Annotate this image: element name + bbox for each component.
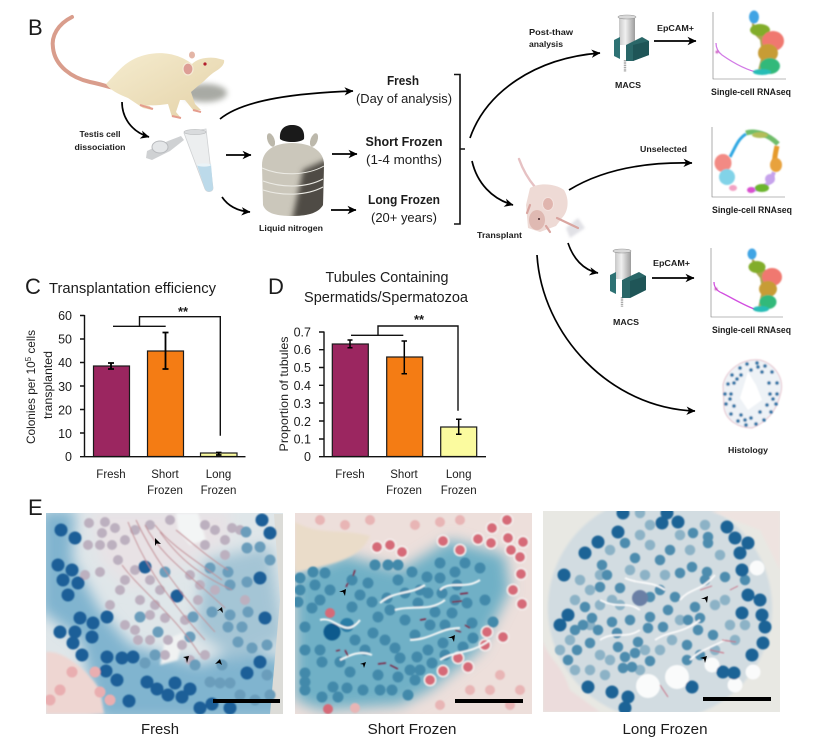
bar: long frozen C xyxy=(200,453,237,456)
text: testis cell dissociation: dissociation xyxy=(74,142,126,152)
axis tick labels D: 0.5 xyxy=(294,361,311,375)
icon: liquid nitrogen tank xyxy=(262,125,324,216)
bar: long frozen D xyxy=(441,427,477,456)
text: MACS top: MACS xyxy=(615,80,641,90)
chart: UMAP top xyxy=(713,10,786,79)
significance stars D: ** xyxy=(414,312,425,327)
text: short frozen condition: Short Frozen xyxy=(366,135,442,149)
arrow: tube to liquid nitrogen xyxy=(226,154,251,156)
text: fresh condition: (Day of analysis) xyxy=(356,92,452,106)
micrograph: short frozen xyxy=(295,513,532,714)
text: MACS lower: MACS xyxy=(613,317,639,327)
arrow: tank to long frozen xyxy=(331,209,356,211)
bar: short frozen D xyxy=(387,357,423,456)
arrow: mouse to unselected scRNAseq xyxy=(569,163,692,190)
micrograph: long frozen xyxy=(543,511,780,712)
axis tick labels D: 0.7 xyxy=(294,326,311,340)
y-axis label C xyxy=(24,330,55,444)
arrowheads: long frozen xyxy=(700,596,708,663)
category labels D: Short xyxy=(390,469,419,481)
text: testis cell dissociation: Testis cell xyxy=(80,129,120,139)
panel D: tubules chart xyxy=(268,270,486,497)
axis tick labels D xyxy=(294,326,311,464)
axis tick labels D: 0 xyxy=(304,450,311,464)
axis tick labels D: 0.4 xyxy=(294,379,311,393)
chart title D: Tubules Containing xyxy=(326,270,448,286)
axis tick labels C: 30 xyxy=(58,380,72,394)
axes C xyxy=(80,315,246,457)
axis tick labels D: 0.2 xyxy=(294,415,311,429)
arrow: mouse to histology xyxy=(537,255,695,411)
text: long frozen condition: Long Frozen xyxy=(368,193,440,207)
text: EpCAM+ top: EpCAM+ xyxy=(657,23,694,33)
arrow: to post-thaw analysis xyxy=(470,53,600,138)
micrograph caption: long frozen: Long Frozen xyxy=(622,722,708,738)
axis tick labels C: 20 xyxy=(58,404,72,418)
axis tick labels C: 60 xyxy=(58,309,72,323)
text: histology: Histology xyxy=(728,445,768,455)
text: liquid nitrogen: Liquid nitrogen xyxy=(259,223,323,233)
axis tick labels D: 0.1 xyxy=(294,432,311,446)
arrowheads: fresh xyxy=(155,538,223,665)
y-axis label C: Colonies per 10 xyxy=(24,360,38,444)
arrow: mouse to MACS xyxy=(568,243,598,273)
arrow: tube lower curve to liquid nitrogen xyxy=(222,197,250,212)
significance bracket D xyxy=(351,326,458,411)
panel E: histology micrographs xyxy=(28,495,780,738)
category labels D: Long xyxy=(446,469,471,481)
y-axis label C: cells xyxy=(24,330,38,357)
category labels C: Long xyxy=(206,469,231,481)
category labels C: Fresh xyxy=(96,469,126,481)
error bars D xyxy=(348,340,462,434)
category labels C xyxy=(96,469,236,497)
text: single-cell RNAseq lower: Single-cell RNAseq xyxy=(712,325,791,335)
category labels C: Short xyxy=(151,469,180,481)
text: single-cell RNAseq top: Single-cell RNAseq xyxy=(711,87,791,97)
bracket: merge conditions xyxy=(454,74,465,224)
axis tick labels C: 40 xyxy=(58,356,72,370)
category labels C: Frozen xyxy=(201,485,236,497)
error bars C xyxy=(108,332,222,455)
axis tick labels C xyxy=(58,309,72,464)
text: transplant: Transplant xyxy=(477,230,522,240)
panel letter B: B xyxy=(28,15,43,40)
y-axis label C: 5 xyxy=(24,356,33,361)
category labels D: Fresh xyxy=(335,469,365,481)
text: long frozen condition xyxy=(368,193,440,225)
significance stars C: ** xyxy=(178,304,189,319)
text: short frozen condition: (1-4 months) xyxy=(366,153,442,167)
text: single-cell RNAseq middle: Single-cell RNAseq xyxy=(712,205,792,215)
micrograph: fresh xyxy=(40,510,290,720)
category labels C: Frozen xyxy=(147,485,183,497)
icon: microcentrifuge tube xyxy=(146,129,213,192)
arrow: lower MACS to scRNAseq xyxy=(652,277,694,279)
axis tick labels D: 0.6 xyxy=(294,343,311,357)
scale bar: fresh xyxy=(213,699,280,703)
significance bracket C xyxy=(113,317,220,436)
axis tick labels D: 0.3 xyxy=(294,397,311,411)
text: EpCAM+ lower: EpCAM+ xyxy=(653,258,690,268)
axes D xyxy=(319,332,486,457)
arrow: MACS to scRNAseq top xyxy=(654,40,696,42)
panel B: experimental workflow xyxy=(28,10,792,455)
panel C: transplantation efficiency chart xyxy=(24,274,246,497)
text: fresh condition xyxy=(356,74,452,106)
arrow: to transplant mouse xyxy=(472,161,513,205)
text: short frozen condition xyxy=(366,135,442,167)
axis tick labels C: 10 xyxy=(58,427,72,441)
icon: nude mouse xyxy=(519,159,585,238)
icon: MACS column top xyxy=(614,15,649,72)
text: long frozen condition: (20+ years) xyxy=(371,211,437,225)
scale bar: long frozen xyxy=(703,697,771,701)
bar: fresh C xyxy=(94,366,130,456)
icon: white rat xyxy=(53,17,227,118)
arrow: tube to fresh xyxy=(220,91,353,119)
text: unselected: Unselected xyxy=(640,144,687,154)
panel letter E: E xyxy=(28,495,43,520)
image: histology section xyxy=(723,360,782,428)
arrow: tank to short frozen xyxy=(332,153,357,155)
axis tick labels C: 0 xyxy=(65,450,72,464)
arrowheads: short frozen xyxy=(339,589,455,668)
axis tick labels C: 50 xyxy=(58,332,72,346)
bar: fresh D xyxy=(332,344,368,456)
y-axis label D: Proportion of tubules xyxy=(277,337,291,451)
category labels D xyxy=(335,469,477,497)
chart title D xyxy=(304,270,469,306)
chart: UMAP lower xyxy=(711,248,783,317)
micrograph caption: fresh: Fresh xyxy=(141,722,179,738)
chart title D: Spermatids/Spermatozoa xyxy=(304,290,469,306)
scale bar: short frozen xyxy=(455,699,523,703)
text: testis cell dissociation xyxy=(74,129,126,152)
micrograph caption: short frozen: Short Frozen xyxy=(368,722,456,738)
bar: short frozen C xyxy=(148,351,184,456)
arrow: rat to dissociation xyxy=(122,102,149,137)
category labels D: Frozen xyxy=(441,485,477,497)
text: post-thaw analysis xyxy=(529,27,573,49)
panel letter C: C xyxy=(25,274,41,299)
chart title C: Transplantation efficiency xyxy=(49,281,217,297)
category labels D: Frozen xyxy=(386,485,422,497)
text: post-thaw analysis: Post-thaw xyxy=(529,27,573,37)
y-axis label C: transplanted xyxy=(41,351,55,419)
chart: UMAP ring xyxy=(712,127,785,197)
text: post-thaw analysis: analysis xyxy=(529,39,563,49)
panel letter D: D xyxy=(268,274,284,299)
text: fresh condition: Fresh xyxy=(387,74,419,88)
icon: MACS column lower xyxy=(610,249,646,307)
